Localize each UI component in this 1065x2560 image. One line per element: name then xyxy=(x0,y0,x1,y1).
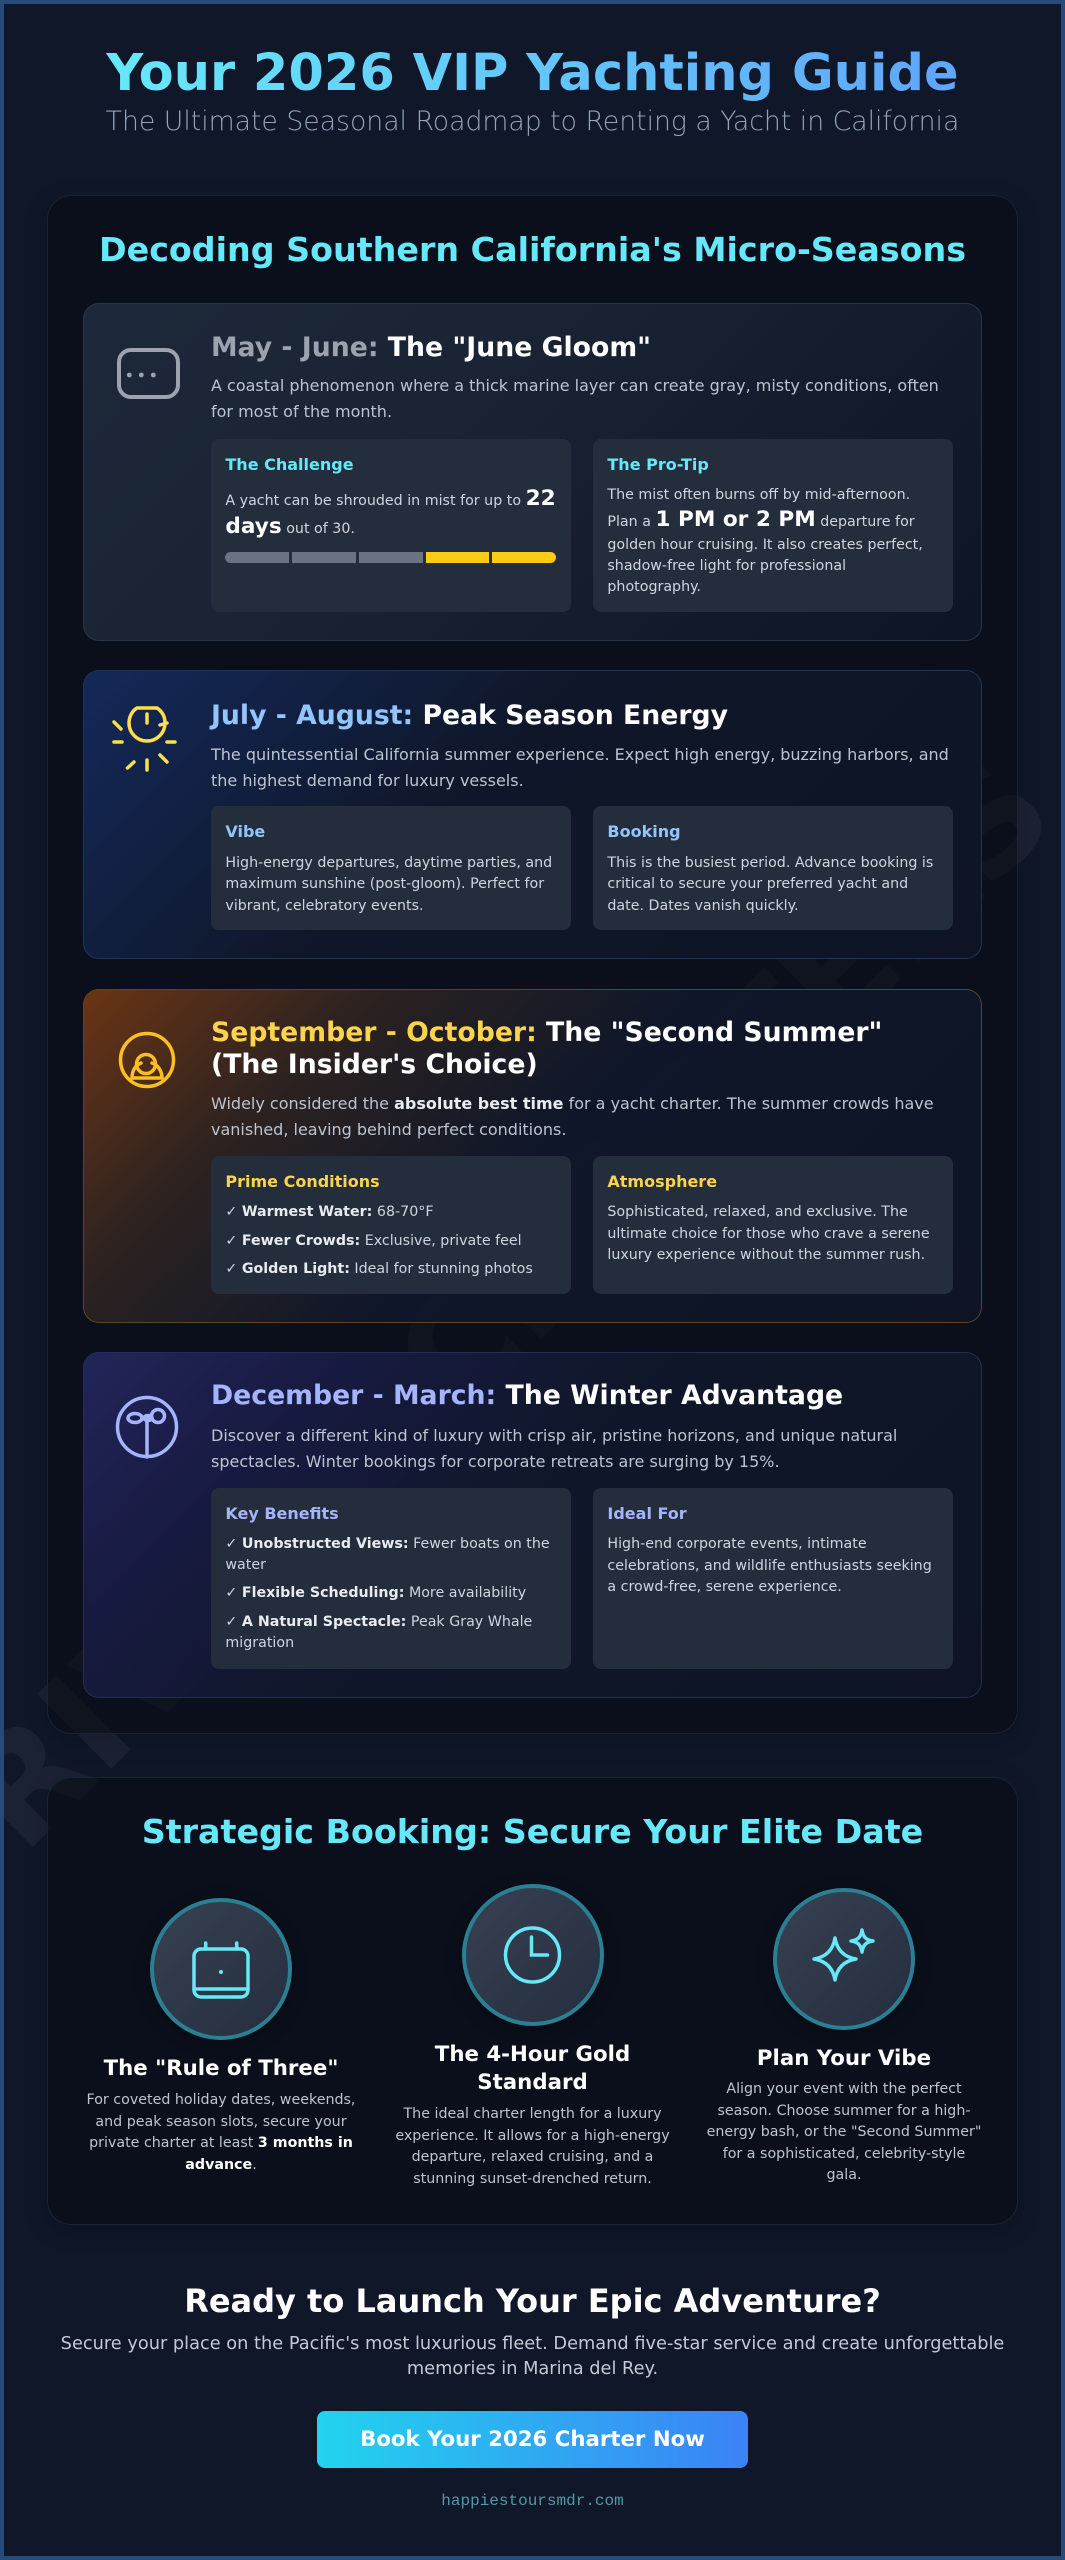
sub-panel: key benefits xyxy=(211,1488,571,1669)
title: Your 2026 VIP Yachting Guide xyxy=(106,44,959,103)
sub-panel: key benefits: ✓ Flexible Scheduling: More availability xyxy=(225,1585,526,1601)
heading: strategic booking: Strategic Booking: Secure Your Elite Date xyxy=(142,1812,923,1850)
feature text: season. Choose summer for a high- xyxy=(718,2103,970,2119)
feature text: Align your event with the perfect xyxy=(726,2081,962,2097)
sub text xyxy=(225,486,556,539)
feature title: Plan Your Vibe xyxy=(757,2046,931,2070)
icon: cloud box xyxy=(117,348,180,399)
feature text: For coveted holiday dates, weekends, xyxy=(87,2092,355,2108)
sub text: luxury experience without the summer rush. xyxy=(607,1247,925,1263)
checklist xyxy=(225,1204,533,1277)
checklist xyxy=(225,1536,550,1651)
sub text: date. Dates vanish quickly. xyxy=(607,898,799,914)
sub text xyxy=(607,1536,932,1595)
card: July - August xyxy=(83,670,982,959)
panel: strategic booking xyxy=(47,1777,1018,2225)
feature text: private charter at least 3 months in xyxy=(89,2135,353,2151)
sub-panel: atmosphere xyxy=(593,1156,953,1294)
panel: micro-seasons xyxy=(47,195,1018,1734)
icon: clock xyxy=(462,1884,604,2026)
card intro: for most of the month. xyxy=(211,402,392,421)
sub text: High-end corporate events, intimate xyxy=(607,1536,867,1552)
sub-panel: prime conditions: ✓ Fewer Crowds: Exclusive, private feel xyxy=(225,1233,522,1249)
feature text xyxy=(395,2106,670,2187)
feature text: gala. xyxy=(827,2167,861,2183)
sub-panel: prime conditions xyxy=(211,1156,571,1294)
feature title xyxy=(434,2042,630,2095)
card: May - June xyxy=(83,303,982,641)
sub heading: Ideal For xyxy=(607,1504,687,1523)
icon: sun xyxy=(112,706,177,772)
feature text: and peak season slots, secure your xyxy=(95,2114,347,2130)
card intro: The quintessential California summer experience. Expect high energy, buzzing harbors, and xyxy=(211,745,949,764)
sub heading: Atmosphere xyxy=(607,1172,717,1191)
sub heading: Booking xyxy=(607,822,681,841)
website url: happiestoursmdr.com xyxy=(441,2492,624,2510)
sub text: A yacht can be shrouded in mist for up to 22 xyxy=(225,486,556,511)
card: September - October xyxy=(83,989,982,1323)
call to action text xyxy=(61,2334,1004,2379)
card intro: Widely considered the absolute best time for a yacht charter. The summer crowds have xyxy=(211,1094,934,1113)
card: December - March xyxy=(83,1352,982,1698)
sub text: days out of 30. xyxy=(225,514,355,539)
call to action text: Secure your place on the Pacific's most luxurious fleet. Demand five-star service and create unforgettable xyxy=(61,2334,1004,2354)
icon: calendar xyxy=(150,1898,292,2040)
card heading: December - March: The Winter Advantage xyxy=(211,1380,843,1411)
sub-panel: booking xyxy=(593,806,953,930)
feature text xyxy=(87,2092,355,2173)
sub text: maximum sunshine (post-gloom). Perfect for xyxy=(225,876,544,892)
call to action text: memories in Marina del Rey. xyxy=(407,2359,658,2379)
sub-panel: the pro-tip: The mist often burns off by mid-afternoon. xyxy=(607,487,910,503)
column: rule of three xyxy=(87,1898,355,2173)
sub heading: The Pro-Tip xyxy=(607,455,709,474)
icon: sun over hill xyxy=(118,1032,176,1088)
sub text: This is the busiest period. Advance booking is xyxy=(607,855,933,871)
card intro: vanished, leaving behind perfect conditions. xyxy=(211,1120,566,1139)
sub-panel: the pro-tip: Plan a 1 PM or 2 PM departure for xyxy=(607,507,915,532)
sub text: a crowd-free, serene experience. xyxy=(607,1579,842,1595)
sub-panel: key benefits: ✓ Unobstructed Views: Fewer boats on the xyxy=(225,1536,550,1552)
card intro xyxy=(211,1094,934,1139)
sub text: critical to secure your preferred yacht and xyxy=(607,876,908,892)
card intro xyxy=(210,745,949,790)
subtitle: The Ultimate Seasonal Roadmap to Renting a Yacht in California xyxy=(106,106,959,137)
card heading: May - June: The "June Gloom" xyxy=(211,332,651,363)
sub text xyxy=(225,855,552,914)
feature text: experience. It allows for a high-energy xyxy=(395,2128,670,2144)
card intro xyxy=(211,376,939,421)
sub heading: Key Benefits xyxy=(225,1504,339,1523)
card intro: Discover a different kind of luxury with crisp air, pristine horizons, and unique natural xyxy=(211,1426,897,1445)
feature text: for a sophisticated, celebrity-style xyxy=(723,2146,965,2162)
sub-panel: the pro-tip: photography. xyxy=(607,579,701,595)
sub text: vibrant, celebratory events. xyxy=(225,898,424,914)
feature text: departure, relaxed cruising, and a xyxy=(412,2149,653,2165)
feature text: energy bash, or the "Second Summer" xyxy=(707,2124,981,2140)
icon: sparkles xyxy=(773,1888,915,2030)
feature text: The ideal charter length for a luxury xyxy=(403,2106,662,2122)
sub-panel: ideal for xyxy=(593,1488,953,1669)
sub text: Sophisticated, relaxed, and exclusive. The xyxy=(607,1204,908,1220)
card intro: the highest demand for luxury vessels. xyxy=(211,771,524,790)
sub-panel: vibe xyxy=(211,806,571,930)
feature text: advance. xyxy=(185,2157,257,2173)
sub-panel: the pro-tip: shadow-free light for professional xyxy=(607,558,846,574)
sub-panel: the pro-tip: golden hour cruising. It also creates perfect, xyxy=(607,537,923,553)
sub heading: Prime Conditions xyxy=(225,1172,380,1191)
sub-panel: the challenge xyxy=(211,439,571,612)
sub text: High-energy departures, daytime parties, and xyxy=(225,855,552,871)
icon: whale tail xyxy=(116,1396,178,1459)
sub text xyxy=(607,487,923,595)
feature text xyxy=(707,2081,981,2183)
sub-panel: key benefits: water xyxy=(225,1557,266,1573)
sub-panel: key benefits: ✓ A Natural Spectacle: Peak Gray Whale xyxy=(225,1614,532,1630)
card heading: September - October: The "Second Summer" xyxy=(211,1017,882,1048)
heading: micro-seasons: Decoding Southern California's Micro-Seasons xyxy=(99,230,966,268)
feature title: The "Rule of Three" xyxy=(104,2056,338,2080)
sub heading: The Challenge xyxy=(225,455,354,474)
progress bar xyxy=(225,552,556,563)
card intro xyxy=(211,1426,897,1471)
card heading xyxy=(211,1017,882,1080)
card heading: (The Insider's Choice) xyxy=(211,1049,538,1080)
feature title: Standard xyxy=(477,2070,588,2095)
sub-panel: the pro-tip xyxy=(593,439,953,612)
column: 4-hour gold standard xyxy=(395,1884,670,2187)
sub text xyxy=(607,1204,930,1263)
sub heading: Vibe xyxy=(225,822,265,841)
card heading: July - August: Peak Season Energy xyxy=(211,700,728,731)
column: plan your vibe xyxy=(707,1888,981,2183)
button xyxy=(317,2411,748,2468)
sub-panel: prime conditions: ✓ Warmest Water: 68-70°F xyxy=(225,1204,434,1220)
sub-panel: prime conditions: ✓ Golden Light: Ideal for stunning photos xyxy=(225,1261,533,1277)
card intro: spectacles. Winter bookings for corporate retreats are surging by 15%. xyxy=(211,1452,780,1471)
sub text: celebrations, and wildlife enthusiasts seeking xyxy=(607,1558,932,1574)
call to action heading: Ready to Launch Your Epic Adventure? xyxy=(184,2282,881,2320)
sub-panel: key benefits: migration xyxy=(225,1635,294,1651)
sub text: ultimate choice for those who crave a serene xyxy=(607,1226,930,1242)
card intro: A coastal phenomenon where a thick marine layer can create gray, misty conditions, often xyxy=(211,376,939,395)
button: Book Your 2026 Charter Now xyxy=(360,2427,705,2452)
sub text xyxy=(607,855,933,914)
feature title: The 4-Hour Gold xyxy=(435,2042,630,2067)
feature text: stunning sunset-drenched return. xyxy=(413,2171,652,2187)
